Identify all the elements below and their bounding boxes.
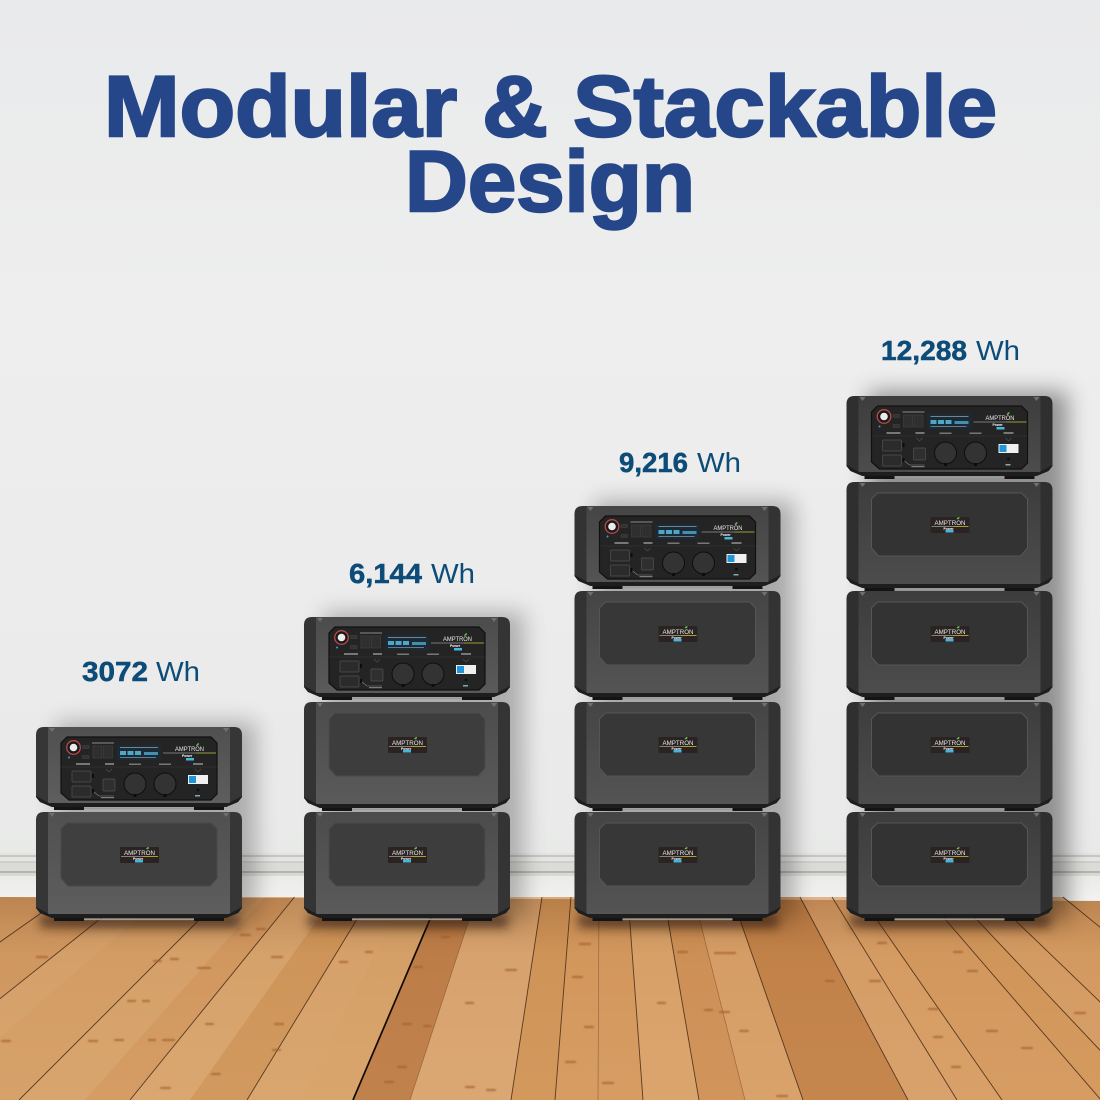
baseboard <box>0 853 1100 900</box>
label: 6,144 Wh: Wh <box>431 558 475 589</box>
label: 3072 Wh: 3072 <box>82 656 148 687</box>
label: 12,288 Wh: 12,288 <box>881 335 967 366</box>
stack 3: four units <box>574 506 780 921</box>
battery unit: Power <box>944 857 954 861</box>
battery unit: AMPTRON <box>934 740 966 747</box>
battery unit <box>846 591 1052 700</box>
battery unit <box>304 812 510 921</box>
battery unit: AMPTRON <box>934 850 966 857</box>
battery unit: Power <box>672 857 682 861</box>
battery unit: Power <box>944 747 954 751</box>
control unit <box>846 396 1052 479</box>
battery unit: AMPTRON <box>392 850 423 857</box>
title <box>104 59 997 230</box>
control unit: Power <box>720 533 731 537</box>
label: 9,216 Wh <box>619 447 741 478</box>
battery unit: AMPTRON <box>662 850 694 857</box>
control unit <box>36 727 242 810</box>
battery unit: AMPTRON <box>662 740 694 747</box>
battery unit <box>304 702 510 811</box>
control unit: Power <box>992 423 1003 427</box>
battery unit <box>574 591 780 700</box>
control unit <box>304 617 510 700</box>
wooden floor <box>0 897 1100 1100</box>
battery unit: Power <box>401 747 412 751</box>
battery unit: AMPTRON <box>934 520 966 527</box>
control unit: AMPTRON <box>714 525 743 532</box>
label: 12,288 Wh: Wh <box>976 335 1020 366</box>
battery unit: AMPTRON <box>934 629 966 636</box>
label: 12,288 Wh <box>881 335 1020 366</box>
battery unit: Power <box>672 747 682 751</box>
battery unit <box>846 812 1052 921</box>
battery unit <box>574 812 780 921</box>
label: 6,144 Wh: 6,144 <box>349 558 422 589</box>
stack 2: three units <box>304 617 510 921</box>
battery unit <box>574 702 780 811</box>
control unit: AMPTRON <box>175 746 204 753</box>
control unit <box>574 506 780 589</box>
battery unit: Power <box>401 857 412 861</box>
control unit: Power <box>182 754 193 758</box>
control unit: AMPTRON <box>986 415 1015 422</box>
control unit: Power <box>450 644 461 648</box>
battery unit: AMPTRON <box>124 850 155 857</box>
battery unit: AMPTRON <box>392 740 423 747</box>
battery unit: Power <box>672 636 682 640</box>
stack 4: five units <box>846 396 1052 921</box>
label: 3072 Wh: Wh <box>156 656 200 687</box>
label: 6,144 Wh <box>349 558 475 589</box>
battery unit <box>846 702 1052 811</box>
title: Modular & Stackable <box>104 59 997 155</box>
battery unit: AMPTRON <box>662 629 694 636</box>
battery unit <box>846 482 1052 591</box>
stack shadows <box>40 391 1068 928</box>
label: 9,216 Wh: 9,216 <box>619 447 688 478</box>
label: 3072 Wh <box>82 656 200 687</box>
control unit: AMPTRON <box>443 636 472 643</box>
battery unit: Power <box>944 527 954 531</box>
stack 1: two units <box>36 727 242 921</box>
battery unit <box>36 812 242 921</box>
battery unit: Power <box>133 857 144 861</box>
label: 9,216 Wh: Wh <box>697 447 741 478</box>
title: Design <box>405 134 695 230</box>
battery unit: Power <box>944 636 954 640</box>
